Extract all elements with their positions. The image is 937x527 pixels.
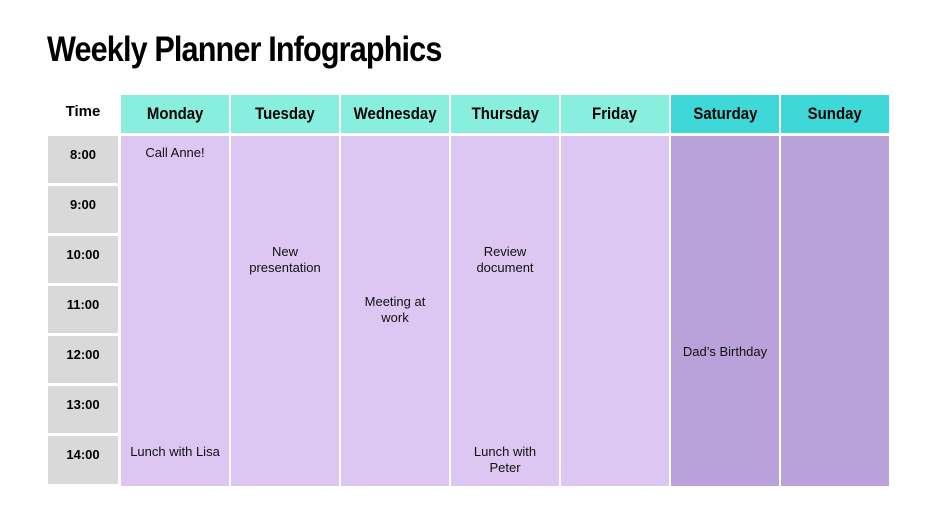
- thursday: Peter: [489, 460, 521, 475]
- wednesday: Meeting at: [365, 294, 425, 309]
- time column: 9:00: [70, 197, 96, 212]
- monday: [121, 136, 229, 486]
- saturday: [671, 136, 779, 486]
- day columns: [121, 136, 889, 486]
- time column: 8:00: [70, 147, 96, 162]
- header row: Sunday: [808, 104, 862, 123]
- time column: 14:00: [66, 447, 100, 462]
- saturday: Dad’s Birthday: [683, 344, 767, 359]
- thursday: document: [476, 260, 534, 275]
- wednesday: [341, 136, 449, 486]
- time column: 12:00: [66, 347, 100, 362]
- header row: Tuesday: [255, 104, 315, 123]
- thursday: Review: [484, 244, 526, 259]
- header row: Saturday: [693, 104, 757, 123]
- tuesday: [231, 136, 339, 486]
- sunday: [781, 136, 889, 486]
- friday: [561, 136, 669, 486]
- wednesday: work: [381, 310, 409, 325]
- header row: [121, 95, 889, 133]
- header row: Wednesday: [354, 104, 436, 123]
- time column: 11:00: [67, 297, 99, 312]
- header: time: Time: [66, 103, 100, 120]
- tuesday: presentation: [249, 260, 321, 275]
- tuesday: New: [272, 244, 298, 259]
- thursday: [451, 136, 559, 486]
- thursday: Lunch with: [474, 444, 536, 459]
- header row: Monday: [147, 104, 203, 123]
- monday: Lunch with Lisa: [130, 444, 220, 459]
- monday: Call Anne!: [145, 145, 205, 160]
- header row: Thursday: [471, 104, 539, 123]
- time column: [48, 136, 118, 484]
- header row: Friday: [593, 104, 637, 123]
- time column: 10:00: [66, 247, 100, 262]
- time column: 13:00: [66, 397, 100, 412]
- title: Weekly Planner Infographics: [47, 30, 441, 69]
